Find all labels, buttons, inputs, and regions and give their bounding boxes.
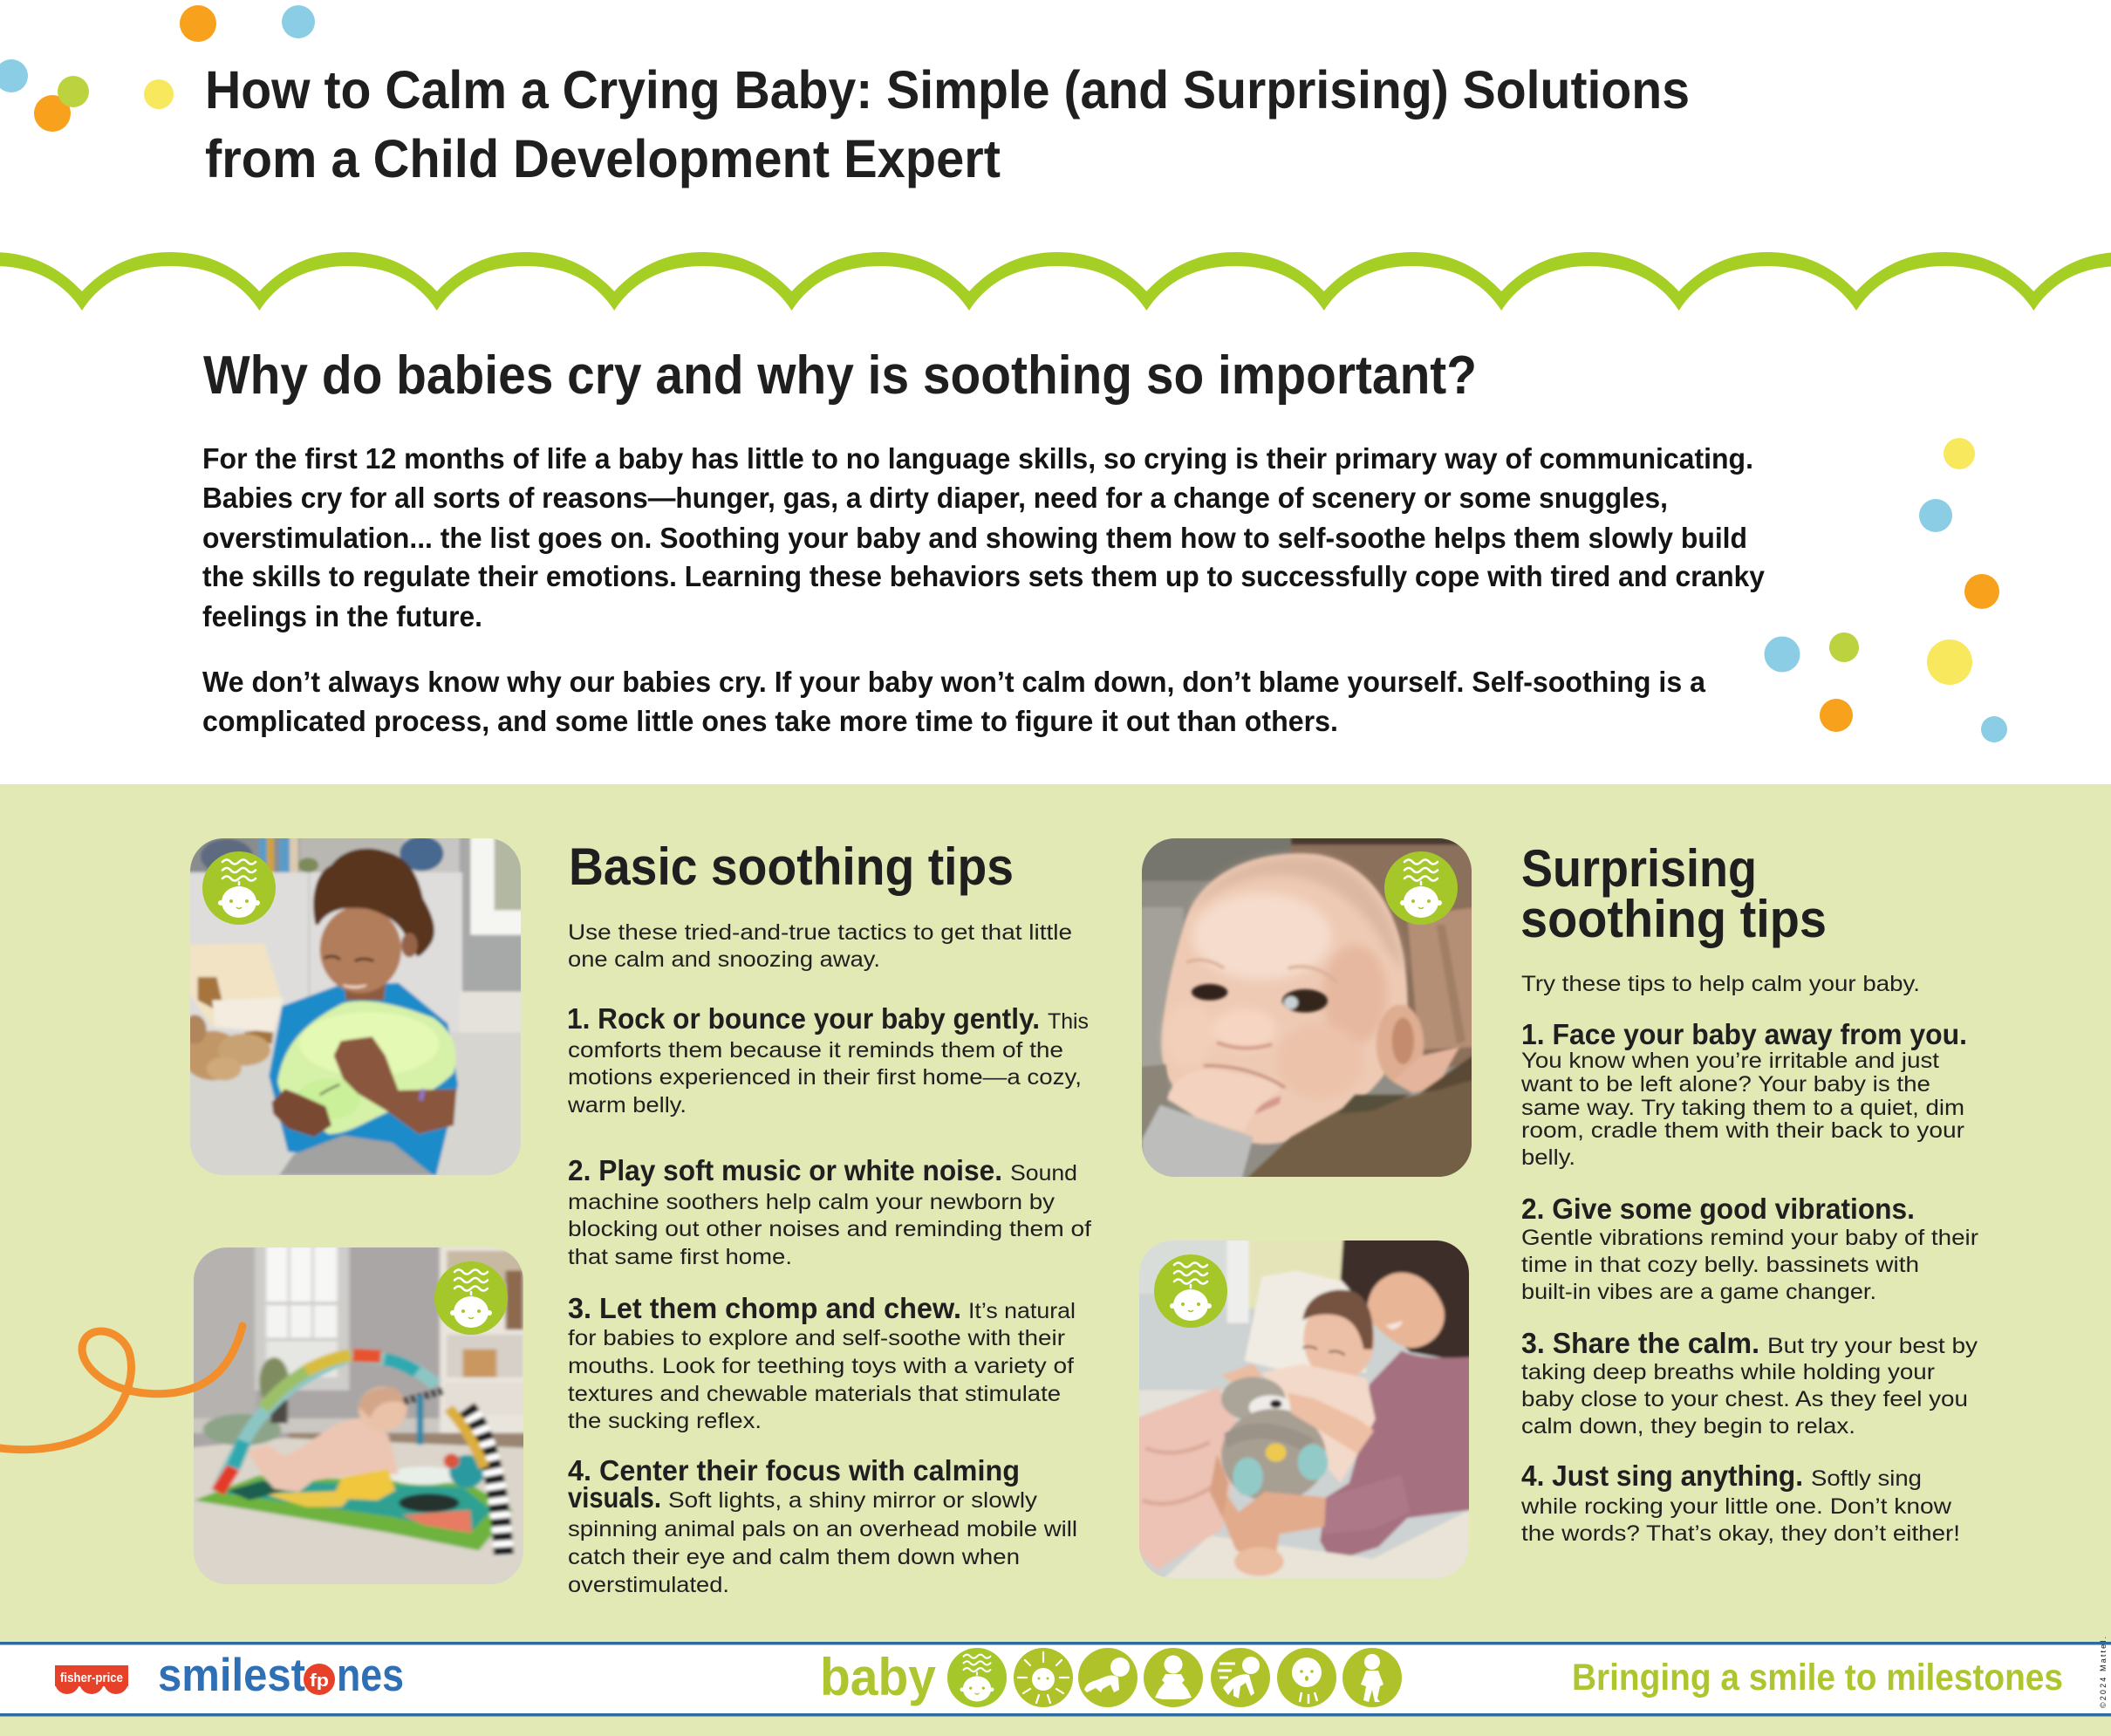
title: How to Calm a Crying Baby: Simple (and Surprising) Solutions: [205, 60, 1690, 120]
icon: soothing baby on photo 4: [1154, 1254, 1227, 1328]
basic tip 4: [568, 1454, 1077, 1597]
intro: basic tips: one calm and snoozing away.: [568, 947, 880, 972]
icon: baby face with sound lines: [1277, 1648, 1336, 1707]
intro text block: Babies cry for all sorts of reasons—hunger, gas, a dirty diaper, need for a change of scenery or some snuggles,: [202, 482, 1668, 514]
heading: surprising soothing tips: soothing tips: [1520, 890, 1827, 948]
surprising tip 1: want to be left alone? Your baby is the: [1520, 1072, 1930, 1097]
heading: surprising soothing tips: [1520, 839, 1827, 948]
footer band: [0, 1642, 2111, 1717]
surprising tip 2: 2. Give some good vibrations.: [1521, 1193, 1915, 1225]
intro text block: [202, 442, 1766, 737]
basic tip 2: machine soothers help calm your newborn by: [568, 1190, 1056, 1214]
basic tip 2: that same first home.: [568, 1245, 792, 1269]
decorative dots: top left: [0, 5, 315, 132]
intro text block: We don’t always know why our babies cry. If your baby won’t calm down, don’t blame yourself. Self-soothing is a: [202, 666, 1706, 698]
basic tip 3: It’s natural: [968, 1299, 1076, 1323]
basic tip 2: 2. Play soft music or white noise.: [568, 1154, 1002, 1186]
panel: tips background: [0, 784, 2111, 1736]
section: basic soothing tips: [567, 837, 1091, 1597]
decorative dots: right: [1764, 438, 2007, 742]
intro text block: For the first 12 months of life a baby has little to no language skills, so crying is their primary way of communicating.: [202, 442, 1753, 475]
basic tip 2: Sound: [1010, 1161, 1077, 1186]
basic tip 4: catch their eye and calm them down when: [568, 1545, 1020, 1569]
intro text block: complicated process, and some little ones take more time to figure it out than others.: [202, 705, 1338, 737]
logo: fisher-price: [55, 1665, 128, 1694]
intro: basic tips: Use these tried-and-true tactics to get that little: [568, 920, 1072, 945]
basic tip 1: comforts them because it reminds them of the: [568, 1038, 1063, 1063]
baby label: baby: [820, 1648, 937, 1706]
basic tip 1: 1. Rock or bounce your baby gently.: [567, 1002, 1040, 1035]
basic tip 4: visuals.: [568, 1481, 661, 1514]
surprising tip 4: Softly sing: [1811, 1466, 1922, 1491]
icon: soothing baby on photo 1: [202, 851, 276, 925]
surprising tip 1: 1. Face your baby away from you.: [1521, 1018, 1967, 1050]
surprising tip 1: You know when you’re irritable and just: [1521, 1049, 1939, 1073]
milestone icon row: [947, 1648, 1402, 1707]
intro text block: the skills to regulate their emotions. Learning these behaviors sets them up to successfully cope with tired and cranky: [202, 560, 1766, 592]
surprising tip 2: time in that cozy belly. bassinets with: [1521, 1253, 1919, 1277]
logo: fisher-price: fisher-price: [60, 1671, 123, 1685]
basic tip 1: warm belly.: [567, 1093, 687, 1117]
icon: sun and baby: [1014, 1648, 1073, 1707]
title: from a Child Development Expert: [205, 129, 1001, 188]
surprising tip 3: taking deep breaths while holding your: [1521, 1360, 1935, 1384]
logo: smilestones: [158, 1650, 404, 1701]
basic tip 4: Soft lights, a shiny mirror or slowly: [668, 1488, 1038, 1513]
surprising tip 2: Gentle vibrations remind your baby of their: [1521, 1226, 1978, 1250]
photo: baby close-up with fist at mouth: [1137, 835, 1477, 1184]
logo: smilestones: nes: [337, 1650, 404, 1701]
basic tip 2: [568, 1154, 1091, 1269]
photo: baby on activity gym: [188, 1244, 530, 1589]
heading: why do babies cry: Why do babies cry and why is soothing so important?: [203, 345, 1477, 406]
basic tip 4: spinning animal pals on an overhead mobile will: [568, 1517, 1077, 1541]
surprising tip 4: while rocking your little one. Don’t know: [1520, 1494, 1952, 1519]
icon: soothing baby on photo 2: [434, 1261, 508, 1335]
basic tip 2: blocking out other noises and reminding them of: [568, 1217, 1091, 1241]
basic tip 3: textures and chewable materials that stimulate: [568, 1382, 1061, 1406]
basic tip 3: mouths. Look for teething toys with a variety of: [568, 1354, 1074, 1378]
scalloped green divider: [0, 252, 2111, 311]
surprising tip 1: [1520, 1018, 1967, 1170]
basic tip 1: motions experienced in their first home—a cozy,: [568, 1065, 1082, 1090]
basic tip 4: 4. Center their focus with calming: [568, 1454, 1020, 1487]
basic tip 3: the sucking reflex.: [568, 1409, 762, 1433]
intro: basic tips: [568, 920, 1072, 972]
surprising tip 3: baby close to your chest. As they feel you: [1521, 1387, 1968, 1411]
section: surprising soothing tips: [1520, 839, 1978, 1546]
surprising tip 3: But try your best by: [1767, 1334, 1978, 1358]
icon: crawling baby: [1078, 1648, 1137, 1707]
orange swirl: [0, 1326, 243, 1450]
icon: soothing baby on photo 3: [1384, 851, 1458, 925]
photo: mother and baby with otter plush: [1134, 1236, 1477, 1585]
surprising tip 3: calm down, they begin to relax.: [1521, 1414, 1855, 1439]
surprising tip 2: built-in vibes are a game changer.: [1521, 1280, 1876, 1304]
basic tip 4: overstimulated.: [568, 1573, 729, 1597]
intro: surprising tips: Try these tips to help calm your baby.: [1521, 972, 1920, 996]
surprising tip 3: [1521, 1327, 1978, 1439]
heading: basic soothing tips: Basic soothing tips: [569, 837, 1014, 896]
surprising tip 1: same way. Try taking them to a quiet, dim: [1521, 1096, 1964, 1120]
tagline: Bringing a smile to milestones: [1572, 1657, 2063, 1698]
logo: smilestones: fp: [310, 1671, 329, 1691]
basic tip 1: This: [1048, 1009, 1089, 1034]
basic tip 1: [567, 1002, 1089, 1117]
surprising tip 2: [1521, 1193, 1978, 1304]
intro text block: overstimulation... the list goes on. Soothing your baby and showing them how to self-soothe helps them slowly build: [202, 522, 1747, 554]
icon: sitting baby: [1144, 1648, 1203, 1707]
surprising tip 3: 3. Share the calm.: [1521, 1327, 1759, 1359]
photo: toddler hugging glowing plush: [183, 835, 526, 1184]
icon: crawling baby with motion lines: [1211, 1648, 1270, 1707]
heading: surprising soothing tips: Surprising: [1521, 839, 1757, 898]
logo: smilestones: smilest: [158, 1650, 305, 1701]
icon: standing baby: [1342, 1648, 1402, 1707]
surprising tip 4: the words? That’s okay, they don’t either!: [1521, 1521, 1960, 1546]
surprising tip 4: 4. Just sing anything.: [1521, 1459, 1803, 1492]
title: [205, 60, 1690, 188]
surprising tip 1: room, cradle them with their back to your: [1521, 1118, 1964, 1143]
copyright: ©2024 Mattel.: [2099, 1637, 2108, 1708]
surprising tip 1: belly.: [1521, 1145, 1575, 1170]
intro text block: feelings in the future.: [202, 600, 482, 632]
surprising tip 4: [1520, 1459, 1960, 1546]
icon: soothing baby: [947, 1648, 1007, 1707]
basic tip 3: 3. Let them chomp and chew.: [568, 1292, 961, 1324]
basic tip 3: for babies to explore and self-soothe with their: [568, 1326, 1065, 1350]
basic tip 3: [568, 1292, 1076, 1433]
